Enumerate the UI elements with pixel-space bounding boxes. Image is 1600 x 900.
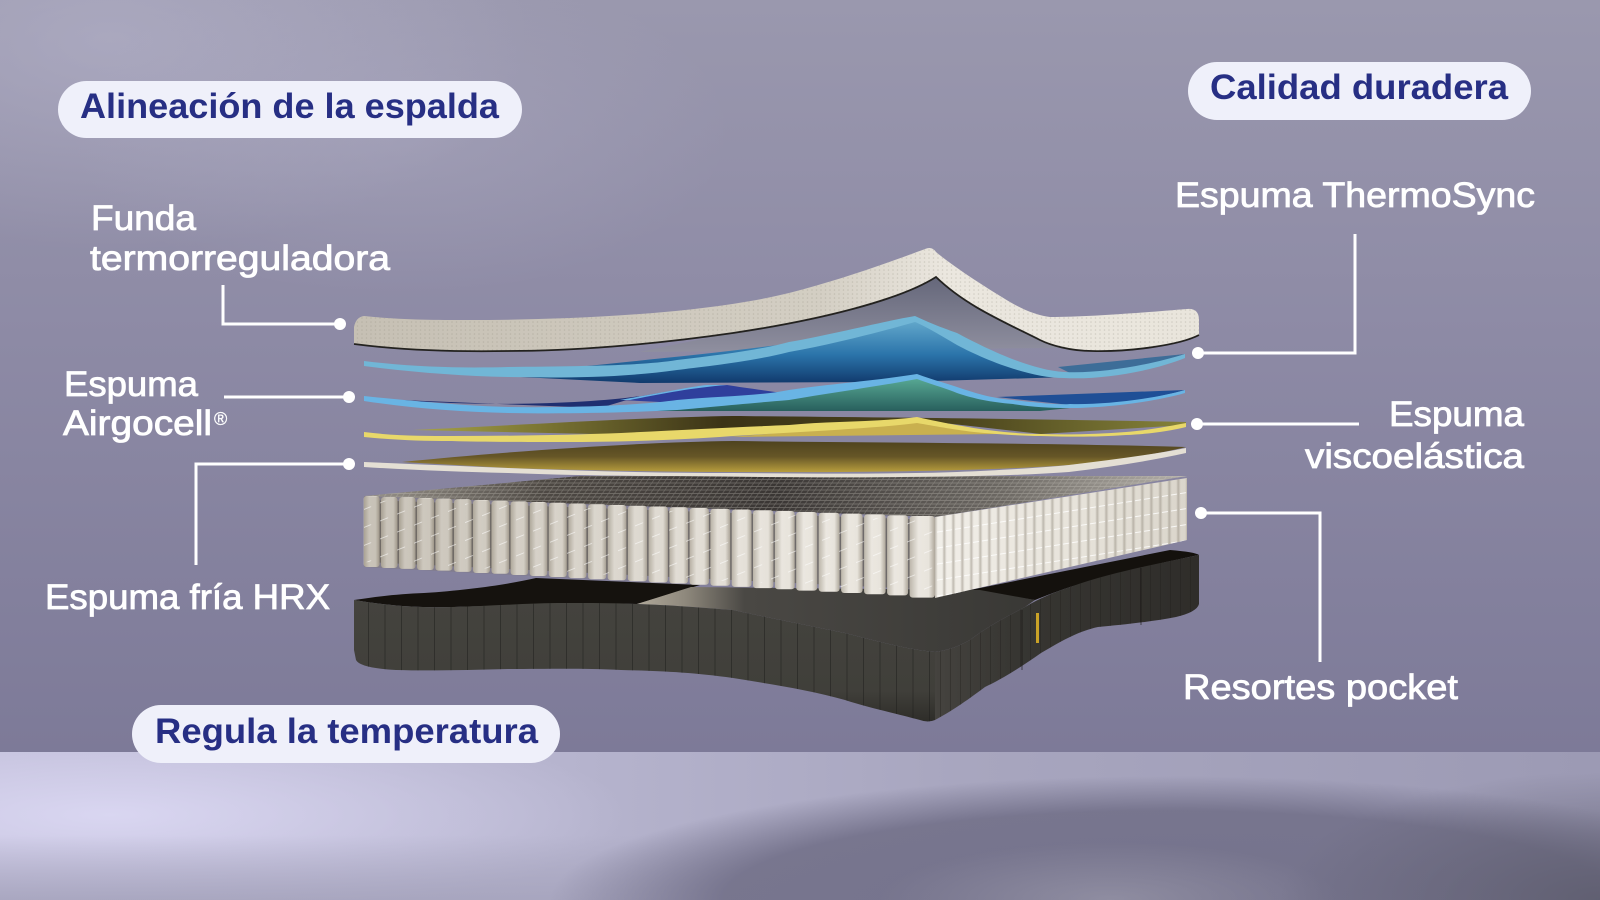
pill: Calidad duradera: Calidad duradera <box>1210 68 1509 107</box>
layer: cold HRX foam <box>364 441 1186 477</box>
label: Espuma Airgocell: ® <box>214 409 227 429</box>
floor <box>0 752 1600 900</box>
layer: viscoelastic foam <box>364 416 1186 442</box>
layer: ThermoSync foam <box>364 316 1185 383</box>
label: Funda termorreguladora: termorreguladora <box>90 239 391 278</box>
leader: Espuma fría HRX <box>196 458 355 565</box>
leader: Espuma viscoelástica <box>1191 418 1359 430</box>
pill: Calidad duradera <box>1188 62 1531 120</box>
pill: Regula la temperatura: Regula la temperatura <box>155 712 539 751</box>
pill: Regula la temperatura <box>132 705 560 763</box>
label: Espuma viscoelástica: viscoelástica <box>1305 437 1525 476</box>
base layer: dark mattress box <box>354 550 1199 722</box>
leader: Resortes pocket <box>1195 507 1320 662</box>
label: Espuma fría HRX: Espuma fría HRX <box>45 578 330 617</box>
mattress exploded layers <box>354 248 1199 722</box>
leader: Funda termorreguladora <box>223 285 346 330</box>
pill: Alineación de la espalda: Alineación de la espalda <box>80 87 500 126</box>
label: Resortes pocket: Resortes pocket <box>1183 668 1458 707</box>
base gold label <box>1036 613 1039 643</box>
label: Funda termorreguladora: Funda <box>91 199 197 238</box>
pocket springs block <box>364 476 1187 598</box>
layer: Airgocell foam <box>364 374 1185 413</box>
layer: thermoregulating cover <box>354 248 1199 352</box>
leader: Espuma ThermoSync <box>1192 234 1355 359</box>
label: Espuma Airgocell: Espuma <box>64 365 199 404</box>
label: Espuma ThermoSync: Espuma ThermoSync <box>1175 176 1535 215</box>
label: Funda termorreguladora <box>90 199 391 278</box>
label: Espuma viscoelástica: Espuma <box>1389 395 1525 434</box>
pill: Alineación de la espalda <box>58 81 522 138</box>
label: Espuma Airgocell: Airgocell <box>63 404 212 443</box>
leader: Espuma Airgocell <box>224 391 355 403</box>
label: Espuma viscoelástica <box>1305 395 1525 476</box>
label: Espuma Airgocell <box>63 365 227 443</box>
